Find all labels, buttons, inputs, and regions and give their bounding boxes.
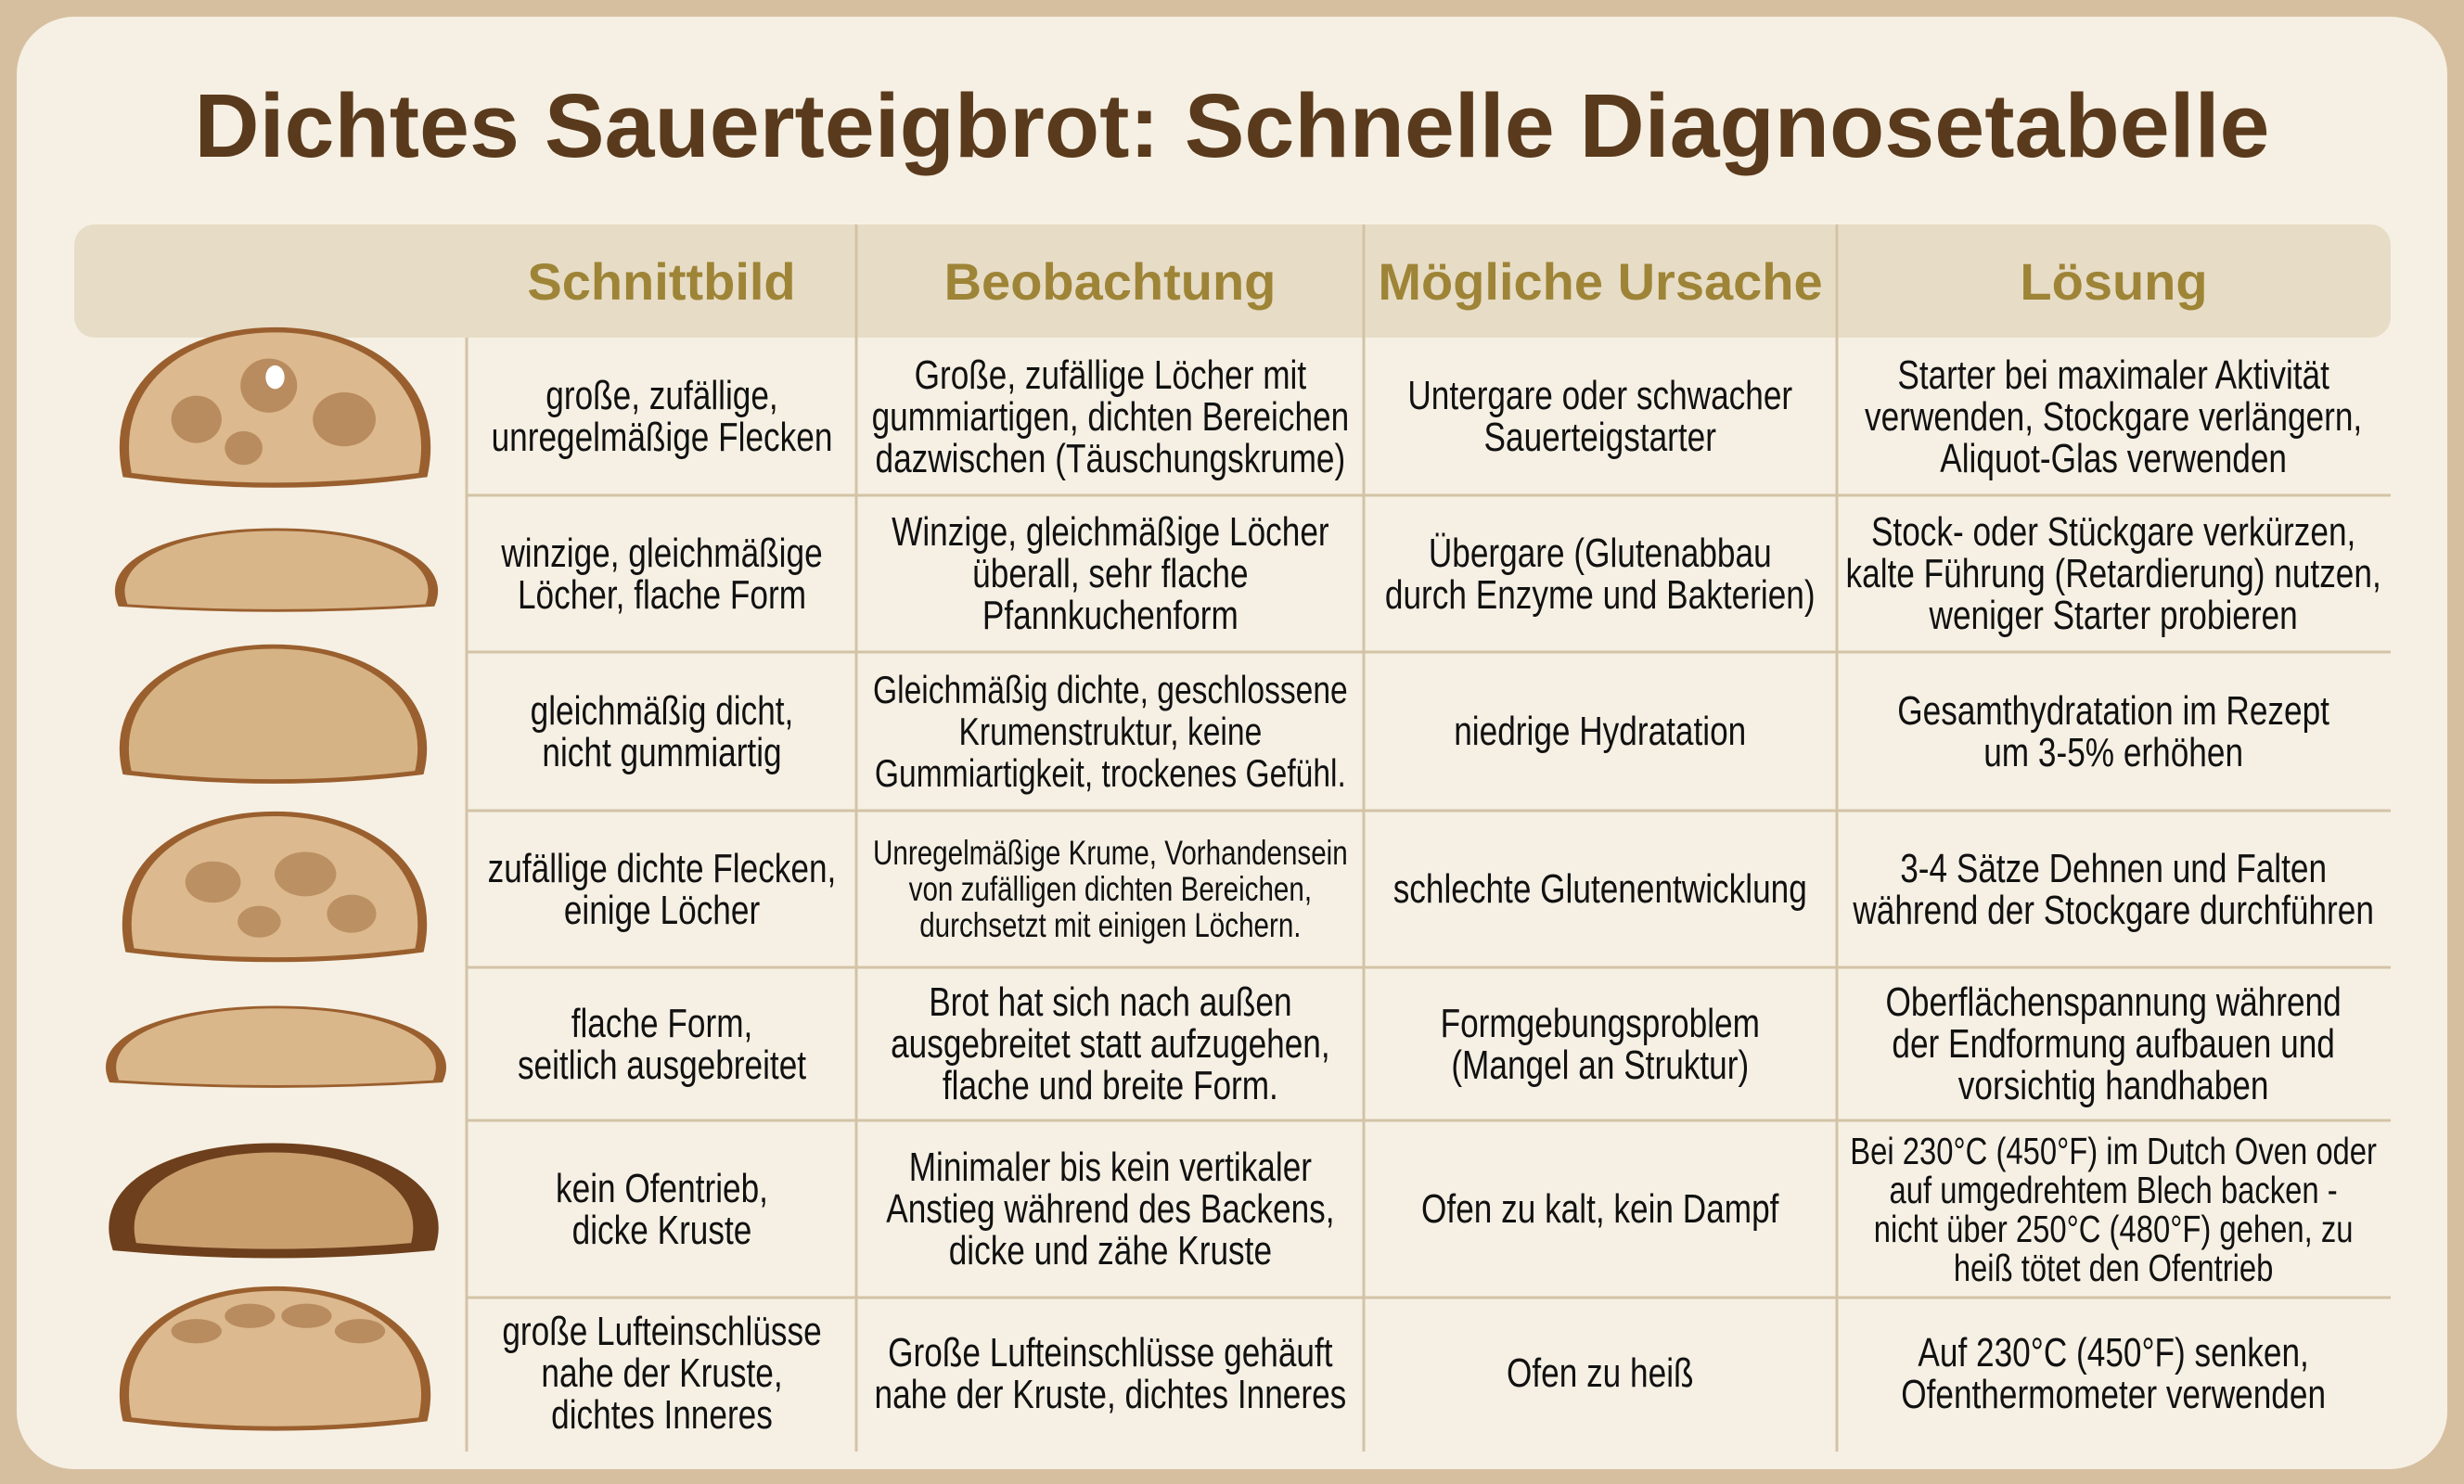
text: Krumenstruktur, keine [958, 710, 1262, 753]
row 5: seitlich ausgebreitet [517, 1043, 806, 1087]
header: Schnittbild: Schnittbild [527, 252, 796, 310]
header: Lösung: Lösung [2020, 252, 2208, 310]
row 1: unregelmäßige Flecken [491, 415, 832, 460]
text: (Mangel an Struktur) [1452, 1043, 1749, 1087]
text: vorsichtig handhaben [1958, 1063, 2269, 1108]
text: flache und breite Form. [943, 1063, 1277, 1108]
text: Ofenthermometer verwenden [1902, 1371, 2326, 1417]
row 4 [487, 846, 836, 933]
text: schlechte Glutenentwicklung [1393, 866, 1807, 912]
text: Minimaler bis kein vertikaler [908, 1145, 1312, 1190]
row 2: Löcher, flache Form [517, 571, 806, 618]
icon: bread 2 flat fine crumb [120, 530, 433, 610]
text: weniger Starter probieren [1930, 593, 2298, 638]
text: niedrige Hydratation [1454, 709, 1747, 754]
text: nahe der Kruste, dichtes Inneres [874, 1371, 1346, 1417]
row 1: große, zufällige, [545, 373, 777, 418]
text: Brot hat sich nach außen [929, 979, 1291, 1025]
text: auf umgedrehtem Blech backen - [1890, 1169, 2338, 1211]
text: Unregelmäßige Krume, Vorhandensein [873, 834, 1347, 872]
row 7: nahe der Kruste, [541, 1350, 782, 1396]
text: Große, zufällige Löcher mit [914, 352, 1306, 397]
text: 3-4 Sätze Dehnen und Falten [1901, 846, 2327, 890]
row 3: gleichmäßig dicht, [530, 688, 793, 733]
text: durch Enzyme und Bakterien) [1385, 571, 1816, 618]
icon: bread 1 large irregular holes [124, 330, 426, 485]
text: dazwischen (Täuschungskrume) [875, 436, 1345, 480]
header bar [74, 224, 2391, 338]
text: von zufälligen dichten Bereichen, [908, 870, 1312, 908]
text: Ofen zu kalt, kein Dampf [1421, 1186, 1779, 1232]
text: Anstieg während des Backens, [886, 1186, 1334, 1232]
row 7: dichtes Inneres [551, 1392, 772, 1438]
text: Aliquot-Glas verwenden [1941, 436, 2287, 480]
row 3: nicht gummiartig [542, 729, 781, 775]
text: durchsetzt mit einigen Löchern. [919, 906, 1301, 944]
text: gummiartigen, dichten Bereichen [871, 393, 1349, 440]
text: Gesamthydratation im Rezept [1898, 688, 2329, 733]
text: Gleichmäßig dichte, geschlossene [873, 668, 1347, 711]
text: während der Stockgare durchführen [1854, 887, 2374, 933]
row 4: einige Löcher [563, 887, 760, 933]
row 7 [502, 1309, 821, 1438]
text: Übergare (Glutenabbau [1429, 531, 1772, 575]
text: Starter bei maximaler Aktivität [1898, 352, 2329, 397]
text: Pfannkuchenform [982, 593, 1238, 638]
row 6 [556, 1165, 767, 1252]
row 5 [517, 1000, 806, 1087]
icon: bread 3 uniform dense [124, 646, 422, 782]
icon: bread 7 tunnels under crust [124, 1288, 426, 1428]
text: ausgebreitet statt aufzugehen, [891, 1021, 1329, 1067]
icon: bread 6 thick crust [122, 1147, 426, 1254]
icon: bread 4 dense patches [127, 813, 422, 960]
header: Mögliche Ursache: Mögliche Ursache [1378, 252, 1823, 310]
row 2: winzige, gleichmäßige [501, 531, 822, 575]
row 7: große Lufteinschlüsse [502, 1309, 821, 1354]
text: Oberflächenspannung während [1886, 979, 2342, 1025]
text: Ofen zu heiß [1507, 1350, 1694, 1396]
text: überall, sehr flache [972, 551, 1248, 596]
header: Beobachtung: Beobachtung [944, 252, 1276, 310]
row 6: dicke Kruste [571, 1208, 751, 1252]
title: Dichtes Sauerteigbrot: Schnelle Diagnosetabelle [195, 75, 2269, 176]
text: verwenden, Stockgare verlängern, [1865, 393, 2363, 440]
text: heiß tötet den Ofentrieb [1954, 1247, 2274, 1289]
text: Bei 230°C (450°F) im Dutch Oven oder [1851, 1130, 2377, 1172]
text: Untergare oder schwacher [1408, 373, 1792, 418]
icon: bread 5 flat spread [111, 1007, 441, 1086]
text: Stock- oder Stückgare verkürzen, [1871, 509, 2356, 555]
text: nicht über 250°C (480°F) gehen, zu [1874, 1208, 2354, 1250]
row 5: flache Form, [571, 1000, 752, 1046]
text: dicke und zähe Kruste [948, 1228, 1272, 1273]
text: Auf 230°C (450°F) senken, [1919, 1330, 2309, 1375]
row 1 [491, 373, 832, 460]
row 2 [501, 531, 822, 618]
row 4: zufällige dichte Flecken, [487, 846, 836, 890]
text: kalte Führung (Retardierung) nutzen, [1846, 551, 2381, 596]
text: Große Lufteinschlüsse gehäuft [888, 1330, 1332, 1375]
text: Gummiartigkeit, trockenes Gefühl. [875, 751, 1345, 795]
text: Sauerteigstarter [1484, 415, 1716, 460]
row 3 [530, 688, 793, 775]
text: Formgebungsproblem [1441, 1000, 1760, 1046]
text: um 3-5% erhöhen [1984, 729, 2243, 775]
text: der Endformung aufbauen und [1893, 1021, 2335, 1067]
text: Winzige, gleichmäßige Löcher [892, 509, 1328, 555]
row 6: kein Ofentrieb, [556, 1165, 767, 1211]
